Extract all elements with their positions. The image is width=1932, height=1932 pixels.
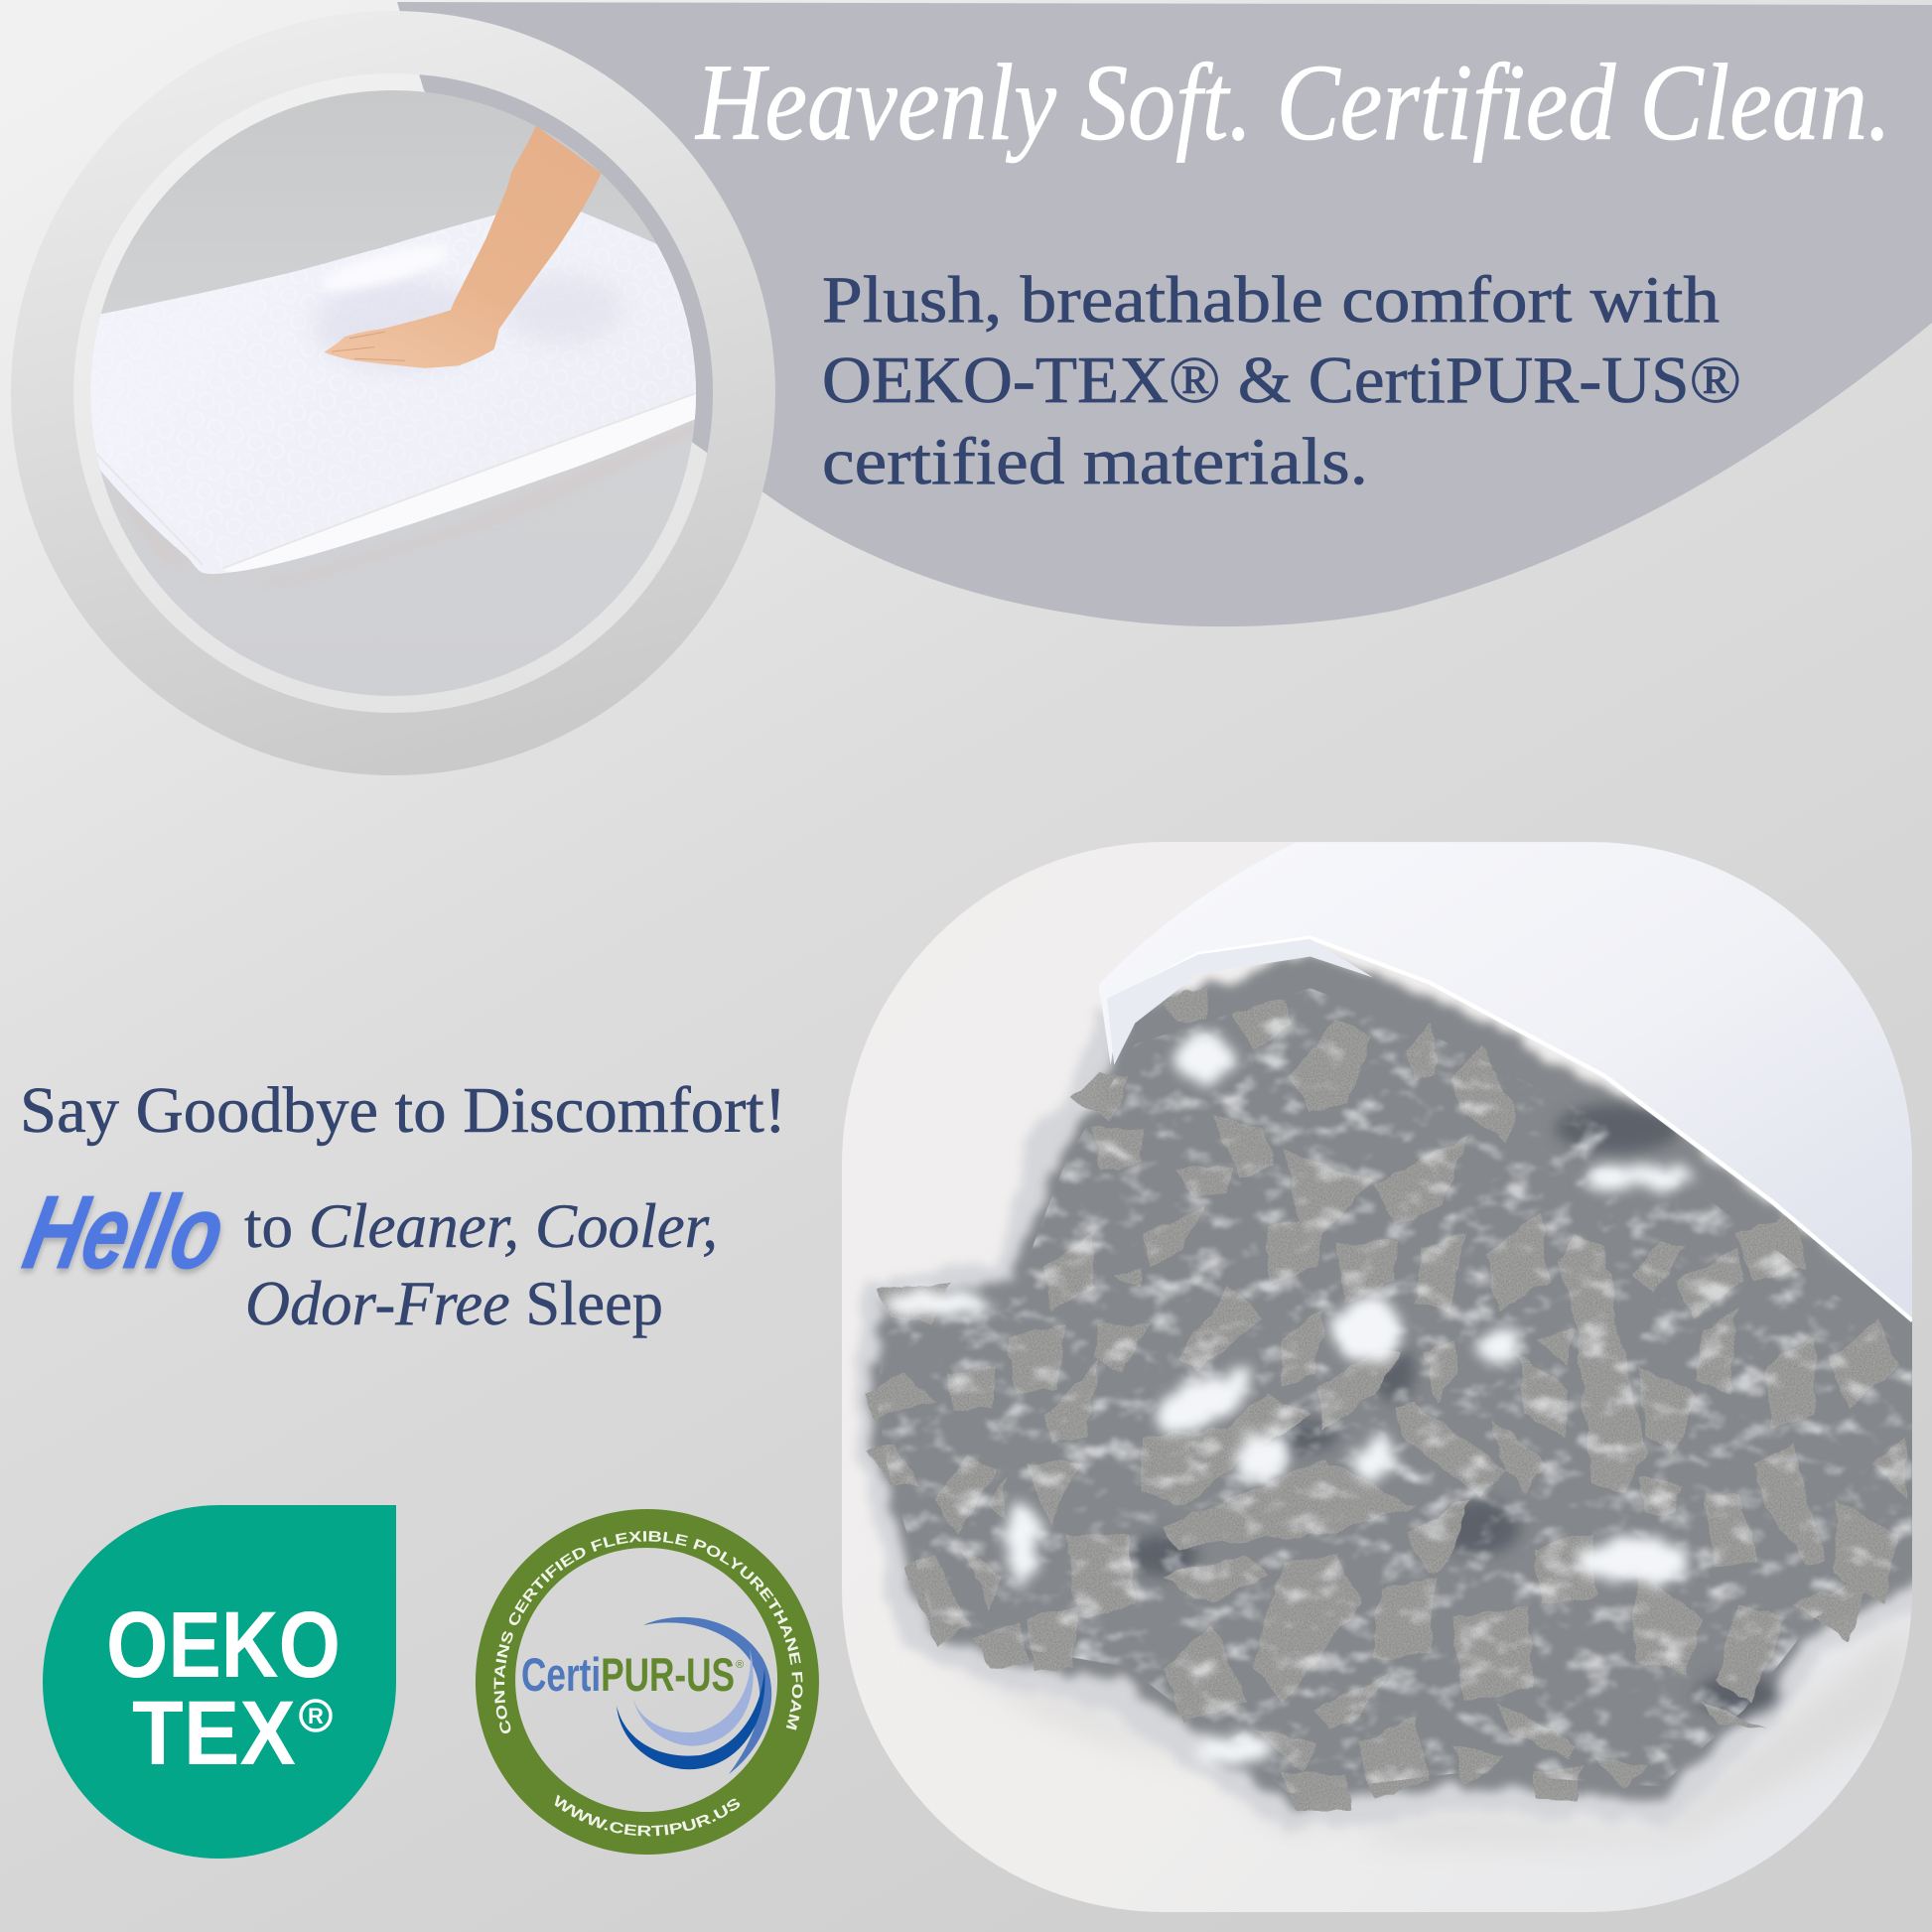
pillow side band	[222, 392, 698, 572]
OEKO-TEX badge: TEX	[132, 1683, 296, 1784]
CertiPUR-US badge: CertiPUR-US	[521, 1648, 735, 1701]
tagline: cleaner cooler odor-free sleep: to Cleaner, Cooler,	[244, 1191, 718, 1261]
pillow body	[86, 207, 725, 574]
foam mass base	[869, 953, 1932, 1808]
OEKO-TEX badge: OEKO	[106, 1592, 341, 1698]
CertiPUR-US badge: ®	[736, 1659, 744, 1671]
outer circular frame	[11, 11, 775, 775]
pillow surface pattern and shading	[320, 250, 610, 365]
CertiPUR-US badge	[475, 1509, 819, 1855]
grey header panel	[397, 2, 1932, 626]
dark gaps	[1128, 1104, 1779, 1717]
inner light ring	[73, 73, 713, 713]
subheading text	[822, 263, 1741, 498]
OEKO-TEX badge: R	[308, 1704, 324, 1728]
tagline: goodbye to discomfort: Say Goodbye to Discomfort!	[20, 1074, 786, 1147]
arm and hand	[325, 126, 602, 368]
photo: hand pressing pillow	[81, 90, 730, 696]
foam edge haze	[869, 1009, 1926, 1815]
tagline: hello word: Hello	[15, 1175, 234, 1291]
subheading text: OEKO-TEX® & CertiPUR-US®	[822, 344, 1741, 417]
tagline: cleaner cooler odor-free sleep: Odor-Free Sleep	[245, 1269, 663, 1338]
white fluff tufts	[883, 1031, 1696, 1767]
pillow shadow	[106, 420, 699, 588]
photo: shredded foam fill spilling from pillow	[842, 842, 1932, 1912]
foam pieces	[862, 988, 1905, 1811]
tagline: cleaner cooler odor-free sleep	[244, 1191, 718, 1338]
soft shadow below foam	[1019, 1640, 1906, 1841]
white fluff streaks	[876, 988, 1912, 1793]
CertiPUR-US badge: WWW.CERTIPUR.US	[554, 1795, 741, 1837]
pillow seam	[96, 392, 698, 568]
subheading text: certified materials.	[822, 425, 1368, 498]
CertiPUR-US badge: CONTAINS CERTIFIED FLEXIBLE POLYURETHANE FOAM	[494, 1531, 802, 1733]
subheading text: Plush, breathable comfort with	[822, 263, 1720, 337]
OEKO-TEX badge	[43, 1505, 396, 1859]
pillow cover	[1099, 842, 1932, 1345]
